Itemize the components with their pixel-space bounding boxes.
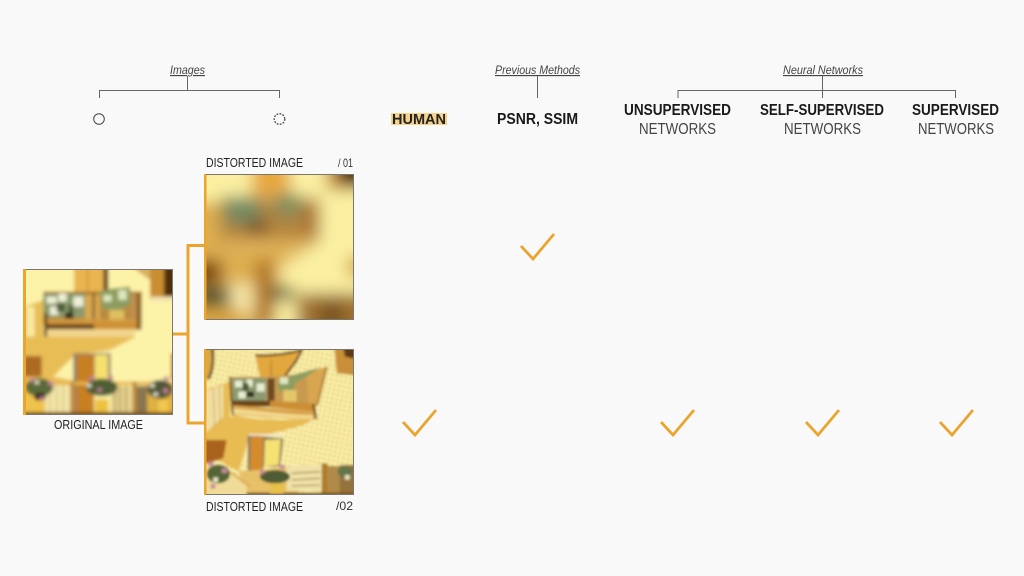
- heading: Neural Networks: Neural Networks: [783, 65, 863, 77]
- label: supervised networks: NETWORKS: [918, 121, 994, 138]
- label: unsupervised networks: [624, 102, 731, 138]
- heading: Previous Methods: Previous Methods: [495, 65, 580, 77]
- icon: check PSNR SSIM row 1: [521, 234, 554, 259]
- icon: check unsupervised row 2: [661, 410, 694, 435]
- highlight: [391, 113, 447, 125]
- icon: check human row 2: [403, 410, 436, 435]
- icon: solid circle: [94, 114, 104, 124]
- label: supervised networks: SUPERVISED: [912, 102, 999, 119]
- column group: Neural Networks: [624, 65, 999, 138]
- label: self-supervised networks: NETWORKS: [784, 121, 861, 138]
- connector: original to distorted images: [172, 246, 204, 423]
- label: unsupervised networks: UNSUPERVISED: [624, 102, 731, 119]
- label: self-supervised networks: [760, 102, 884, 138]
- icon: check supervised row 2: [940, 410, 973, 435]
- label: self-supervised networks: SELF-SUPERVISED: [760, 102, 884, 119]
- label: unsupervised networks: NETWORKS: [639, 121, 716, 138]
- image border: [206, 174, 354, 320]
- panel: original image: [23, 269, 173, 429]
- label: supervised networks: [912, 102, 999, 138]
- caption: distorted image: DISTORTED IMAGE: [206, 500, 303, 514]
- icon: check self-supervised row 2: [806, 410, 839, 435]
- accent bar: [23, 269, 26, 415]
- caption: original image: ORIGINAL IMAGE: [54, 418, 143, 432]
- photo: warped balcony: [206, 350, 353, 494]
- heading: Images: Images: [170, 65, 205, 77]
- panel: distorted image 01: [204, 158, 354, 320]
- panel: distorted image 02: [204, 349, 354, 511]
- index: 02: /02: [336, 499, 353, 513]
- label: HUMAN: HUMAN: [392, 111, 446, 128]
- bracket: Images: [100, 76, 280, 98]
- photo: blurred balcony: [206, 175, 353, 319]
- photo: balcony: [26, 270, 172, 414]
- caption: distorted image: DISTORTED IMAGE: [206, 156, 303, 170]
- index: 01: / 01: [338, 156, 353, 170]
- accent bar: [204, 349, 206, 495]
- image border: [206, 350, 354, 494]
- image border: [26, 270, 172, 414]
- label: PSNR, SSIM: PSNR, SSIM: [497, 111, 578, 128]
- accent bar: [204, 174, 206, 320]
- bracket: Neural Networks: [678, 76, 956, 98]
- column group: Images: [94, 65, 285, 124]
- column heading: Human: [391, 111, 447, 128]
- connector: [536, 76, 538, 98]
- icon: dashed circle: [274, 114, 285, 124]
- column group: Previous Methods: [495, 65, 580, 128]
